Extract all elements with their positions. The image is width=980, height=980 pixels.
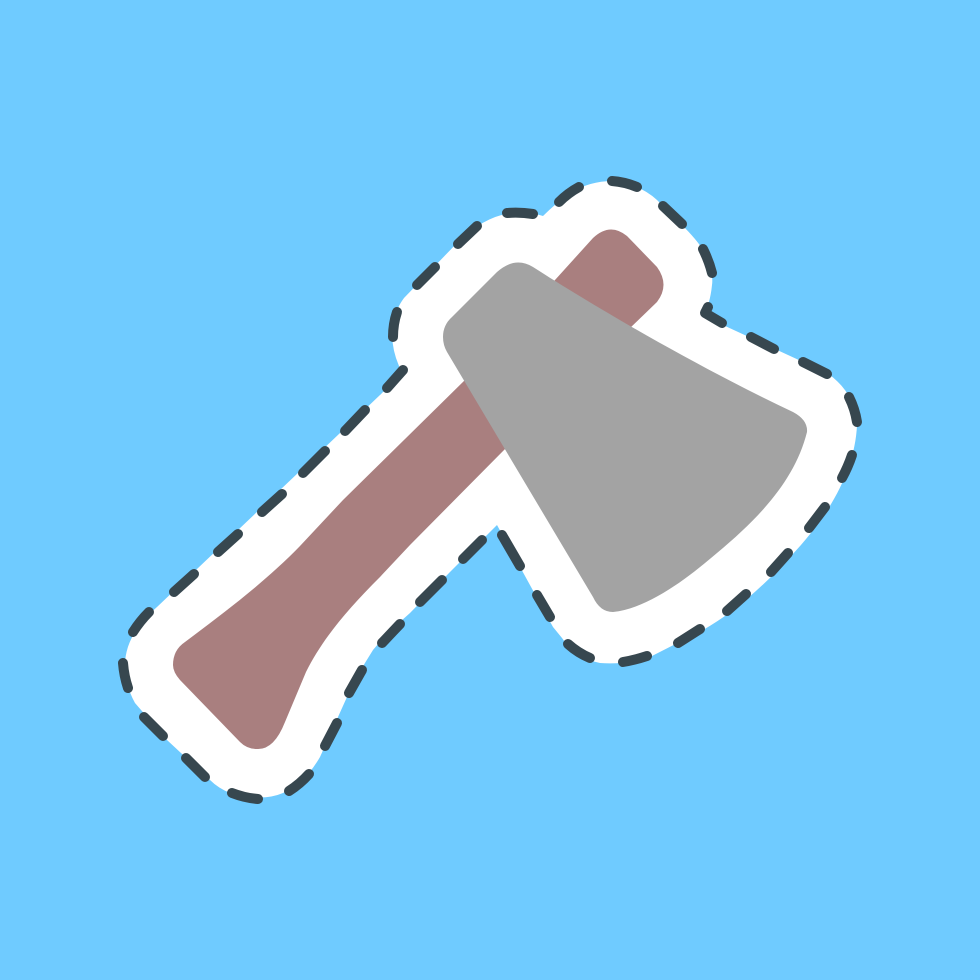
- axe handle: [173, 229, 664, 749]
- axe blade: [443, 263, 807, 612]
- sticker backing: white die-cut shape: [125, 181, 857, 798]
- dashed cut line: [123, 181, 857, 799]
